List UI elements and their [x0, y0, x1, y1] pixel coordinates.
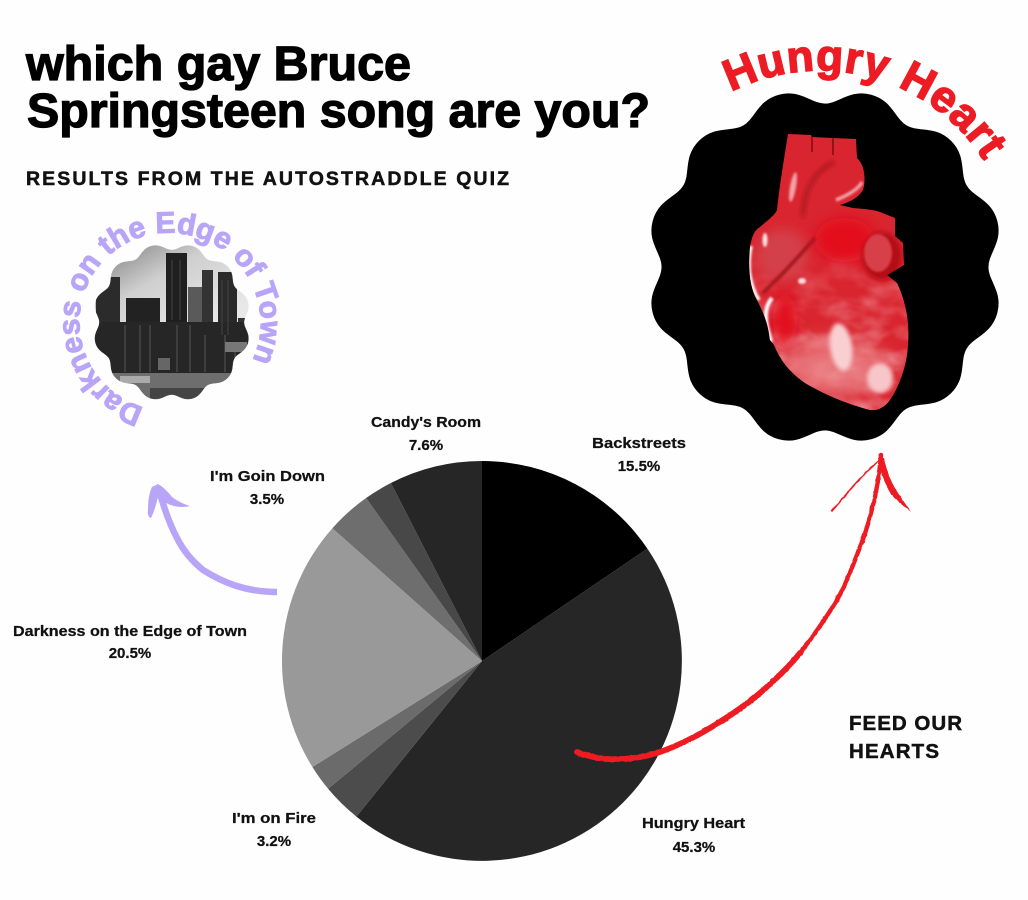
- scalloped black badge: [634, 76, 1016, 458]
- callout: feed our hearts: HEARTS: [849, 740, 939, 763]
- curved heading: Hungry Heart: Hungry Heart: [721, 46, 1006, 161]
- slice: Hungry Heart: [356, 549, 682, 861]
- label: Candy's Room: 7.6%: [409, 437, 443, 454]
- title: which gay Bruce: [25, 38, 411, 91]
- pie labels: [13, 414, 745, 856]
- slice: I'm Goin Down: [332, 498, 482, 661]
- label: Backstreets: 15.5%: [618, 458, 660, 475]
- callout: feed our hearts: [849, 712, 962, 763]
- icon: city skyline photo in scalloped frame: [94, 245, 249, 400]
- subtitle: RESULTS FROM THE AUTOSTRADDLE QUIZ: [26, 168, 509, 190]
- label: Hungry Heart: [642, 815, 745, 856]
- slice: I'm on Fire: [328, 661, 482, 817]
- label: Hungry Heart: Hungry Heart: [642, 815, 745, 832]
- label: Backstreets: [592, 435, 686, 475]
- panel: Darkness on the Edge of Town badge: [62, 212, 280, 427]
- label: Candy's Room: [371, 414, 481, 454]
- title: Springsteen song are you?: [27, 85, 650, 138]
- label: Darkness on the Edge of Town: [13, 623, 247, 662]
- label: I'm on Fire: 3.2%: [257, 833, 291, 850]
- slice: Candy's Room: [391, 461, 482, 661]
- icon: anatomical heart: [749, 134, 908, 410]
- label: I'm Goin Down: 3.5%: [250, 491, 284, 508]
- arrow: purple, to Darkness badge: [148, 484, 277, 592]
- slice: unlabelled small: [312, 661, 482, 789]
- title: [25, 38, 650, 138]
- panel: Hungry Heart badge: [651, 46, 1006, 441]
- label: I'm on Fire: I'm on Fire: [232, 810, 316, 827]
- label: Darkness on the Edge of Town: Darkness on the Edge of Town: [13, 623, 247, 640]
- label: I'm on Fire: [232, 810, 316, 850]
- pie chart: [282, 461, 682, 861]
- curved heading: Darkness on the Edge of Town: Darkness on the Edge of Town: [62, 212, 280, 427]
- slice: Backstreets: [482, 461, 647, 661]
- label: Hungry Heart: 45.3%: [673, 839, 715, 856]
- label: I'm Goin Down: I'm Goin Down: [210, 468, 325, 485]
- label: Backstreets: Backstreets: [592, 435, 686, 452]
- slice: unlabelled small dark: [366, 483, 482, 661]
- label: Candy's Room: Candy's Room: [371, 414, 481, 431]
- callout: feed our hearts: FEED OUR: [849, 712, 962, 735]
- label: I'm Goin Down: [210, 468, 325, 508]
- label: Darkness on the Edge of Town: 20.5%: [109, 645, 151, 662]
- arrow: red, to Hungry Heart badge: [577, 455, 911, 759]
- slice: Darkness on the Edge of Town: [282, 528, 482, 767]
